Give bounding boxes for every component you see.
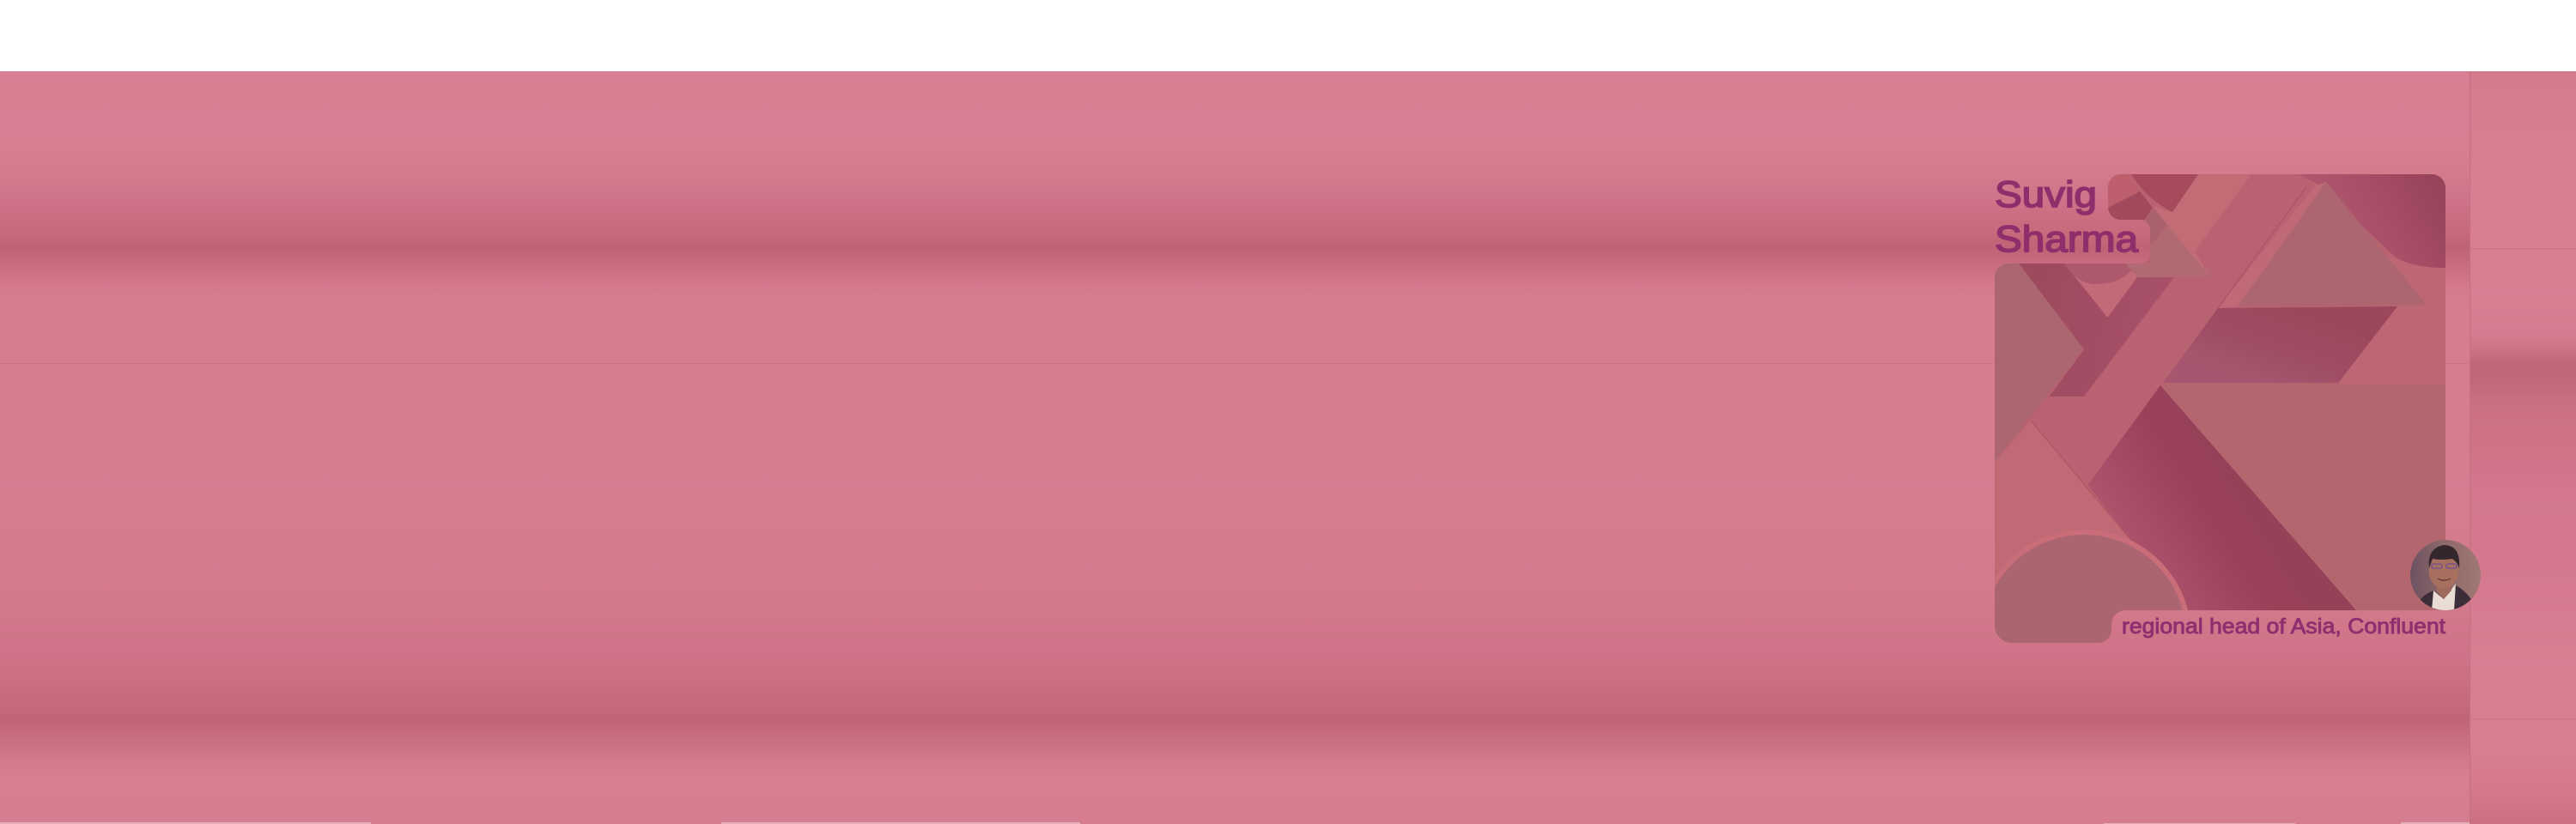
light wedge of top band xyxy=(2153,174,2251,277)
neck xyxy=(2437,586,2451,599)
icon: portrait photo xyxy=(2410,540,2481,610)
thin edge line xyxy=(2031,187,2306,538)
lower dark parallelogram xyxy=(2088,385,2356,610)
top left small tab: dark part xyxy=(2108,191,2153,220)
top left small tab: light part xyxy=(2108,174,2129,206)
light strips at bottom edge xyxy=(0,822,2470,824)
panel: right column background xyxy=(2470,71,2576,824)
jacket xyxy=(2420,585,2471,610)
face xyxy=(2428,559,2459,589)
heading: name: Sharma xyxy=(1995,219,2138,260)
top left dark wedge xyxy=(2131,174,2198,212)
bottom left salmon triangle xyxy=(1995,421,2138,643)
abstract geometric artwork card xyxy=(1995,174,2445,643)
bottom circle xyxy=(1995,535,2183,643)
heading: name: Suvig xyxy=(1995,174,2097,215)
bottom right large panel xyxy=(2160,384,2445,610)
triangle lit face xyxy=(2318,182,2326,188)
bottom circle ring xyxy=(1995,530,2188,610)
top right grey triangle xyxy=(2238,182,2427,306)
dark parallelogram xyxy=(2163,306,2397,383)
smile xyxy=(2438,579,2451,580)
hair xyxy=(2429,545,2459,568)
top right dark gradient shape xyxy=(2299,174,2445,268)
light patch behind dark Y xyxy=(2075,271,2137,317)
light area right of parallelogram xyxy=(2338,258,2445,384)
dark Y shape xyxy=(2019,264,2174,397)
left grey triangle xyxy=(1995,264,2084,462)
text: role: regional head of Asia, Confluent xyxy=(2122,615,2445,639)
base diagonal band xyxy=(1996,174,2397,604)
shirt xyxy=(2432,584,2456,610)
small dark semicircle xyxy=(2064,264,2138,284)
grey sliver beside tab xyxy=(2147,208,2167,245)
grey triangle upper centre xyxy=(2125,264,2150,276)
glasses xyxy=(2432,564,2457,568)
